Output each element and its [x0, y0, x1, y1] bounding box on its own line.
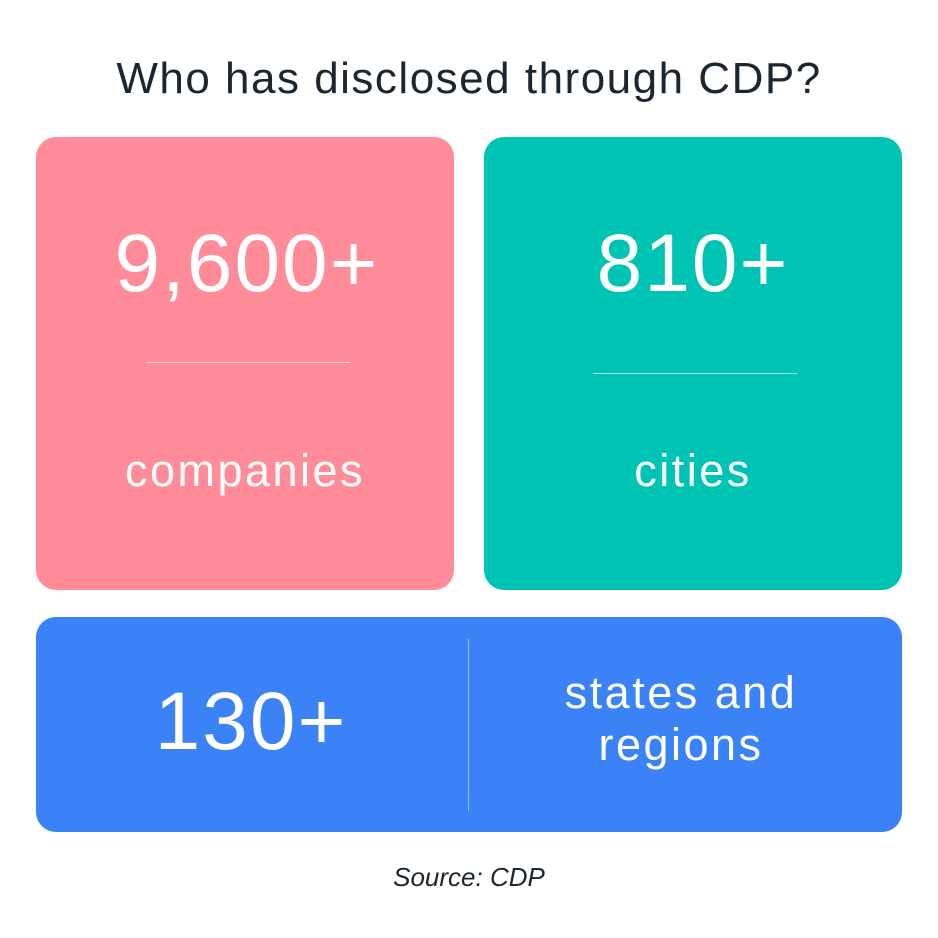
- title: Who has disclosed through CDP?: [116, 54, 822, 103]
- number: companies: 9,600+: [114, 218, 380, 309]
- number: cities: 810+: [597, 218, 789, 309]
- label: cities: cities: [634, 445, 752, 496]
- panel: companies: [36, 137, 454, 590]
- label: states: [565, 667, 797, 770]
- label: states: regions: [598, 719, 764, 770]
- panel: cities: [484, 137, 902, 590]
- label: companies: companies: [125, 445, 365, 496]
- label: states: states and: [565, 667, 797, 718]
- number: states: 130+: [155, 676, 347, 767]
- source: Source: CDP: [393, 862, 545, 892]
- panel: states and regions: [36, 617, 902, 832]
